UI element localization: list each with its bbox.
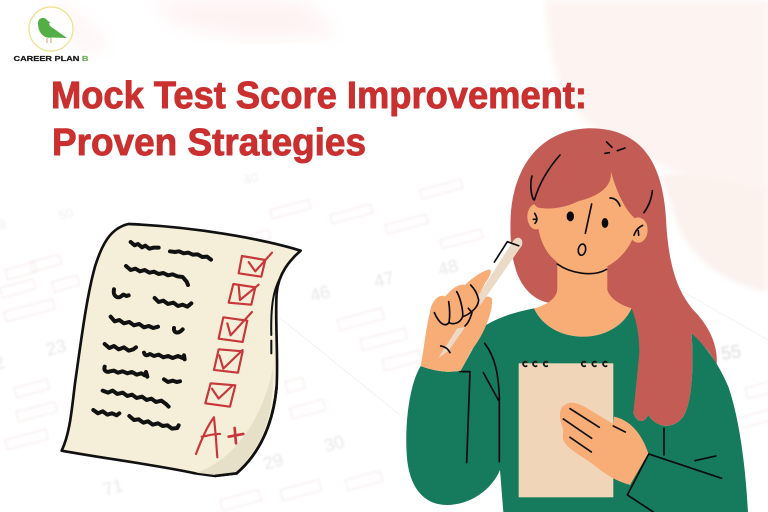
background: blurred answer sheet: 46: [308, 281, 332, 306]
facial features: [531, 142, 652, 274]
paper sheet: [62, 224, 301, 476]
pen: [438, 238, 522, 358]
icon: green bird: [38, 18, 67, 43]
illustration: student with pen and notepad: [406, 128, 748, 512]
paper curl shadow: [196, 367, 273, 475]
face with ears: [527, 140, 655, 272]
red check boxes and grade: [196, 253, 272, 457]
lower hand: [560, 403, 648, 485]
background: blurred answer sheet: 47: [372, 267, 396, 292]
hair: [510, 128, 717, 426]
raised hand with pen: [421, 238, 522, 372]
fingers over pen: [433, 285, 480, 330]
background: blurred answer sheet: 40: [242, 170, 260, 188]
notepad: [519, 362, 613, 497]
illustration: graded test paper: [62, 224, 301, 476]
title: Mock Test Score Improvement:: [51, 75, 587, 117]
title: [51, 75, 587, 164]
neck: [534, 260, 632, 337]
background: blurred answer sheet: 71: [101, 475, 125, 500]
background: blurred answer sheet: 30: [322, 431, 346, 456]
sweater: [406, 308, 748, 512]
sleeve fold lines: [460, 343, 722, 512]
background: blurred answer sheet: 29: [261, 449, 285, 474]
logo text: CAREER PLAN B: [14, 54, 89, 63]
background: blurred answer sheet: 55: [720, 341, 742, 364]
scribbled text lines: [93, 242, 211, 429]
title: Proven Strategies: [52, 122, 366, 164]
background: blurred answer sheet: 48: [436, 255, 460, 280]
icon: logo ring: [29, 7, 73, 51]
background: blurred answer sheet: 23: [44, 335, 68, 360]
logo: Career Plan B: [14, 7, 89, 63]
background: blurred answer sheet: 50: [57, 205, 75, 223]
